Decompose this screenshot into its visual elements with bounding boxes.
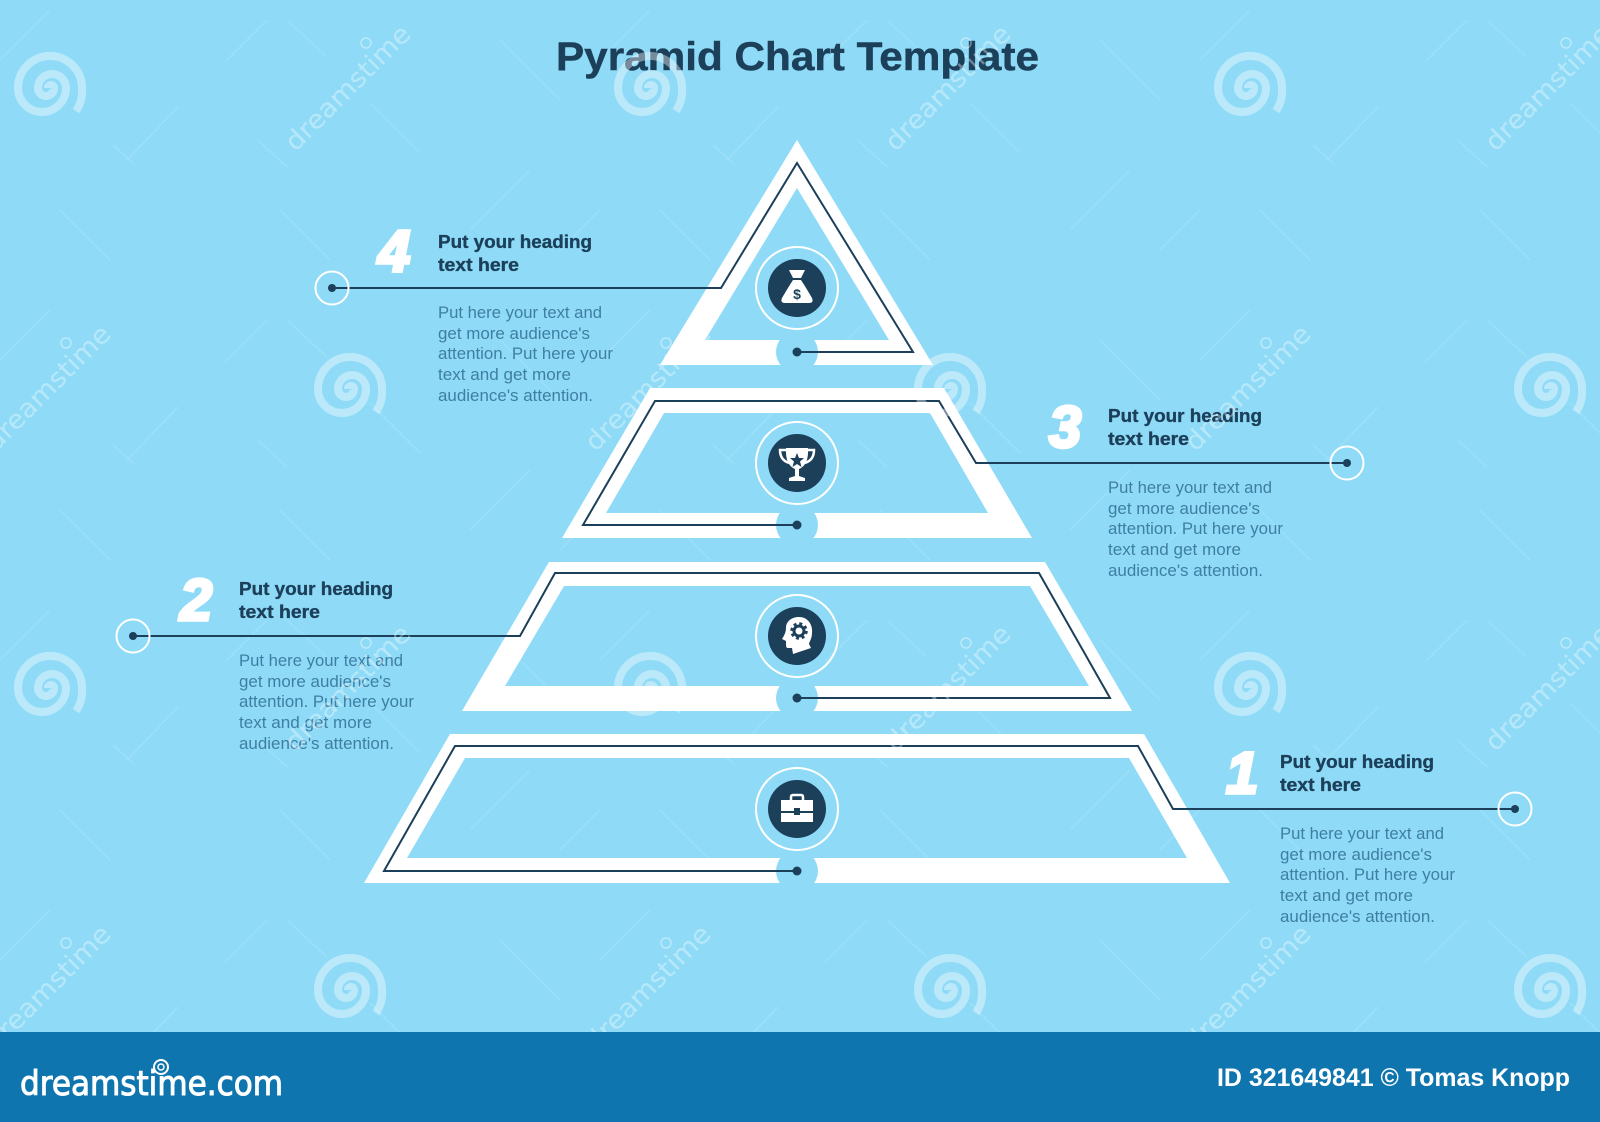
- connector line tier 1: [384, 746, 1532, 876]
- text block 3: text and get more: [1108, 541, 1241, 559]
- text block 4: Put here your text and: [438, 304, 602, 322]
- text block 4: [377, 219, 614, 405]
- text block 1: text here: [1280, 775, 1361, 795]
- text block 3: Put your heading: [1108, 406, 1262, 426]
- text block 1: 1: [1226, 741, 1258, 806]
- text block 2: 2: [179, 568, 212, 633]
- pyramid tier 4: top triangle: [660, 140, 933, 373]
- pyramid tier 2: [462, 562, 1132, 719]
- text block 3: audience's attention.: [1108, 562, 1263, 580]
- icon: money bag: [781, 270, 813, 303]
- text block 4: 4: [377, 219, 410, 284]
- text block 1: Put here your text and: [1280, 825, 1444, 843]
- connector line tier 4: [316, 163, 913, 356]
- text block 3: [1049, 395, 1284, 580]
- text block 2: get more audience's: [239, 673, 391, 691]
- text block 4: get more audience's: [438, 325, 590, 343]
- text block 4: Put your heading: [438, 232, 592, 252]
- icon: briefcase: [781, 795, 813, 822]
- text block 2: [179, 568, 415, 753]
- text block 2: text here: [239, 602, 320, 622]
- icon: head with gear: [782, 617, 812, 654]
- text block 1: Put your heading: [1280, 752, 1434, 772]
- text block 3: 3: [1049, 395, 1081, 460]
- pyramid tier 1: base: [364, 734, 1230, 892]
- footer bar: [0, 1032, 1600, 1122]
- watermark text: dreamstime: [279, 619, 417, 757]
- text block 2: attention. Put here your: [239, 693, 415, 711]
- watermark text: dreamstime: [879, 19, 1017, 157]
- text block 3: attention. Put here your: [1108, 520, 1284, 538]
- connector line tier 3: [583, 401, 1364, 530]
- icon: trophy: [780, 448, 814, 481]
- watermark text: dreamstime: [579, 919, 717, 1057]
- pyramid tier 3: [562, 388, 1032, 546]
- watermark text: dreamstime: [1179, 319, 1317, 457]
- watermark text: dreamstime: [1179, 919, 1317, 1057]
- connector line tier 2: [116, 573, 1110, 702]
- text block 1: get more audience's: [1280, 846, 1432, 864]
- text block 2: audience's attention.: [239, 735, 394, 753]
- text block 3: text here: [1108, 429, 1189, 449]
- text block 1: [1226, 741, 1456, 926]
- text block 4: attention. Put here your: [438, 345, 614, 363]
- text block 3: Put here your text and: [1108, 479, 1272, 497]
- text block 1: text and get more: [1280, 887, 1413, 905]
- text block 4: text and get more: [438, 366, 571, 384]
- watermark text: dreamstime: [579, 319, 717, 457]
- text block 1: audience's attention.: [1280, 908, 1435, 926]
- text block 2: text and get more: [239, 714, 372, 732]
- watermark text: dreamstime: [879, 619, 1017, 757]
- text block 1: attention. Put here your: [1280, 866, 1456, 884]
- watermark text: dreamstime: [279, 19, 417, 157]
- text block 4: audience's attention.: [438, 387, 593, 405]
- text block 2: Put your heading: [239, 579, 393, 599]
- title: Pyramid Chart Template: [556, 35, 1039, 79]
- text block 2: Put here your text and: [239, 652, 403, 670]
- footer credit: ID 321649841 © Tomas Knopp: [1217, 1064, 1570, 1092]
- watermark copyright marks: [61, 38, 1571, 948]
- text block 3: get more audience's: [1108, 500, 1260, 518]
- text block 4: text here: [438, 255, 519, 275]
- footer logo: dreamstime.com: [20, 1064, 283, 1104]
- icon: money bag: $: [793, 286, 801, 302]
